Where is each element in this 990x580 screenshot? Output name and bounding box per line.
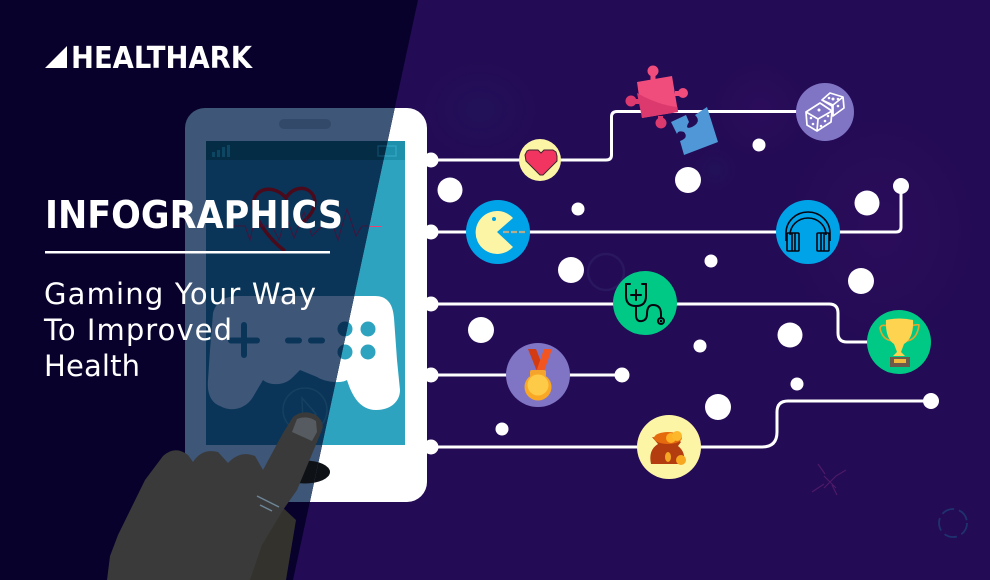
phone (0, 0, 438, 580)
icon: stethoscope (613, 271, 677, 335)
subtitle: Gaming Your Way (44, 277, 316, 311)
logo: Healthark: HEALTHARK (71, 41, 254, 76)
icon: medal (506, 343, 570, 407)
subtitle: To Improved (43, 313, 232, 347)
icon: treasure bag (637, 415, 701, 479)
hand pointing at phone (107, 412, 323, 580)
connector lines (430, 112, 931, 447)
icon: pink puzzle piece (626, 66, 688, 128)
icon: blue puzzle piece (671, 107, 718, 155)
phone: dark side (0, 0, 427, 580)
connector nubs (424, 152, 438, 454)
phone: bright side (310, 108, 427, 502)
subtitle: Health (44, 349, 140, 383)
icon: pac-man (466, 200, 530, 264)
icon: pixel heart (519, 139, 561, 181)
icon: dice (796, 83, 854, 141)
icon: trophy (867, 310, 931, 374)
heading: Infographics: INFOGRAPHICS (45, 193, 343, 238)
subtitle (43, 277, 316, 383)
divider under heading (45, 251, 330, 254)
scattered white dots (438, 138, 939, 436)
icon: headphones (776, 200, 840, 264)
